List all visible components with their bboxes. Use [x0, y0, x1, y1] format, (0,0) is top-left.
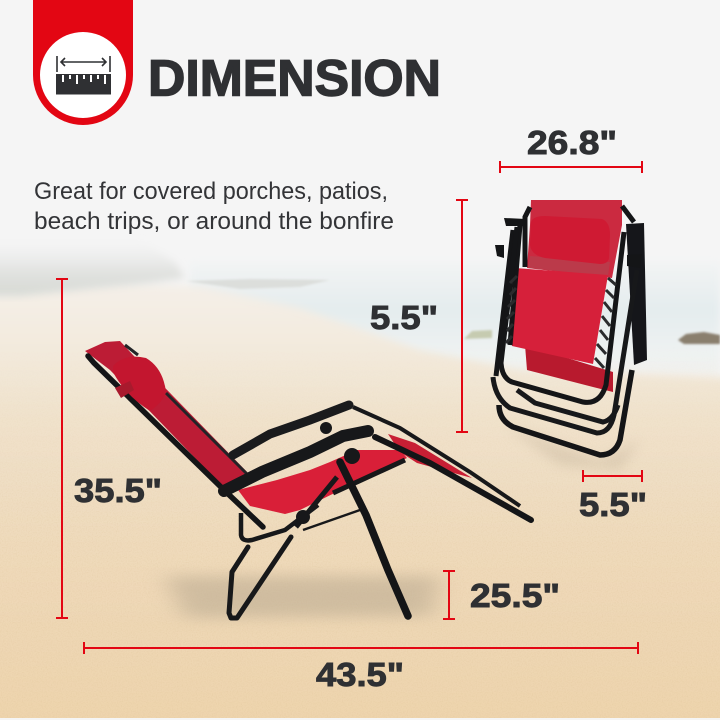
rock right	[678, 332, 720, 344]
dimension: seat height 25.5	[443, 571, 560, 619]
badge icon: ruler in red tab	[33, 0, 133, 125]
back frames	[496, 225, 520, 376]
lacing left	[506, 276, 517, 343]
sea	[190, 262, 720, 382]
sand	[0, 283, 720, 720]
footrest lower frame	[375, 437, 531, 520]
long front leg	[340, 462, 408, 616]
cross bar	[303, 510, 360, 530]
front frame	[501, 227, 624, 402]
dimension: folded depth 5.5: 5.5"	[579, 486, 647, 523]
far armrest	[233, 405, 349, 455]
lacing right	[595, 278, 616, 368]
rear legs	[229, 537, 291, 618]
side-view reclined chair	[85, 341, 531, 618]
background: misty beach	[0, 256, 720, 718]
black armrest panel	[626, 223, 647, 365]
dimension: folded depth 5.5	[579, 470, 647, 523]
headrest pillow	[113, 357, 166, 411]
misty treeline	[0, 240, 185, 296]
seat fabric	[238, 450, 407, 514]
description text: beach trips, or around the bonfire	[34, 208, 394, 235]
distant rocks	[186, 279, 330, 289]
front-view folded chair	[493, 200, 647, 455]
knobs	[495, 218, 642, 268]
rear loop	[241, 505, 318, 540]
dimension: seat height 25.5: 25.5"	[470, 577, 560, 614]
chair shadow	[165, 576, 440, 618]
dimension: height 35.5	[56, 279, 162, 618]
sand grain	[0, 462, 720, 716]
dimension: folded width 26.8	[500, 124, 642, 173]
lower fabric	[525, 345, 613, 392]
back fabric	[85, 341, 250, 487]
main seat fabric	[512, 268, 608, 364]
dimension: length 43.5	[84, 642, 638, 693]
back frame	[88, 356, 263, 527]
seat lower frame	[296, 460, 405, 527]
near armrest	[224, 431, 368, 491]
dimension: length 43.5: 43.5"	[316, 656, 404, 693]
footrest upper frame	[353, 407, 520, 506]
pillow	[530, 216, 610, 264]
dimension: folded height 5.5	[370, 200, 468, 432]
rock left	[464, 330, 492, 339]
dimension: height 35.5: 35.5"	[74, 472, 162, 509]
dimension: folded width 26.8: 26.8"	[527, 124, 617, 161]
top fabric	[527, 200, 622, 278]
pillow strap	[115, 381, 134, 398]
description text: Great for covered porches, patios,	[34, 178, 388, 205]
title: DIMENSION	[148, 50, 441, 106]
folded chair shadow	[505, 425, 640, 470]
footrest fabric	[388, 434, 472, 478]
bottom strip	[0, 718, 720, 720]
joint knobs	[320, 422, 332, 434]
dimension: folded height 5.5: 5.5"	[370, 299, 438, 336]
mesh below pillow	[528, 256, 610, 276]
